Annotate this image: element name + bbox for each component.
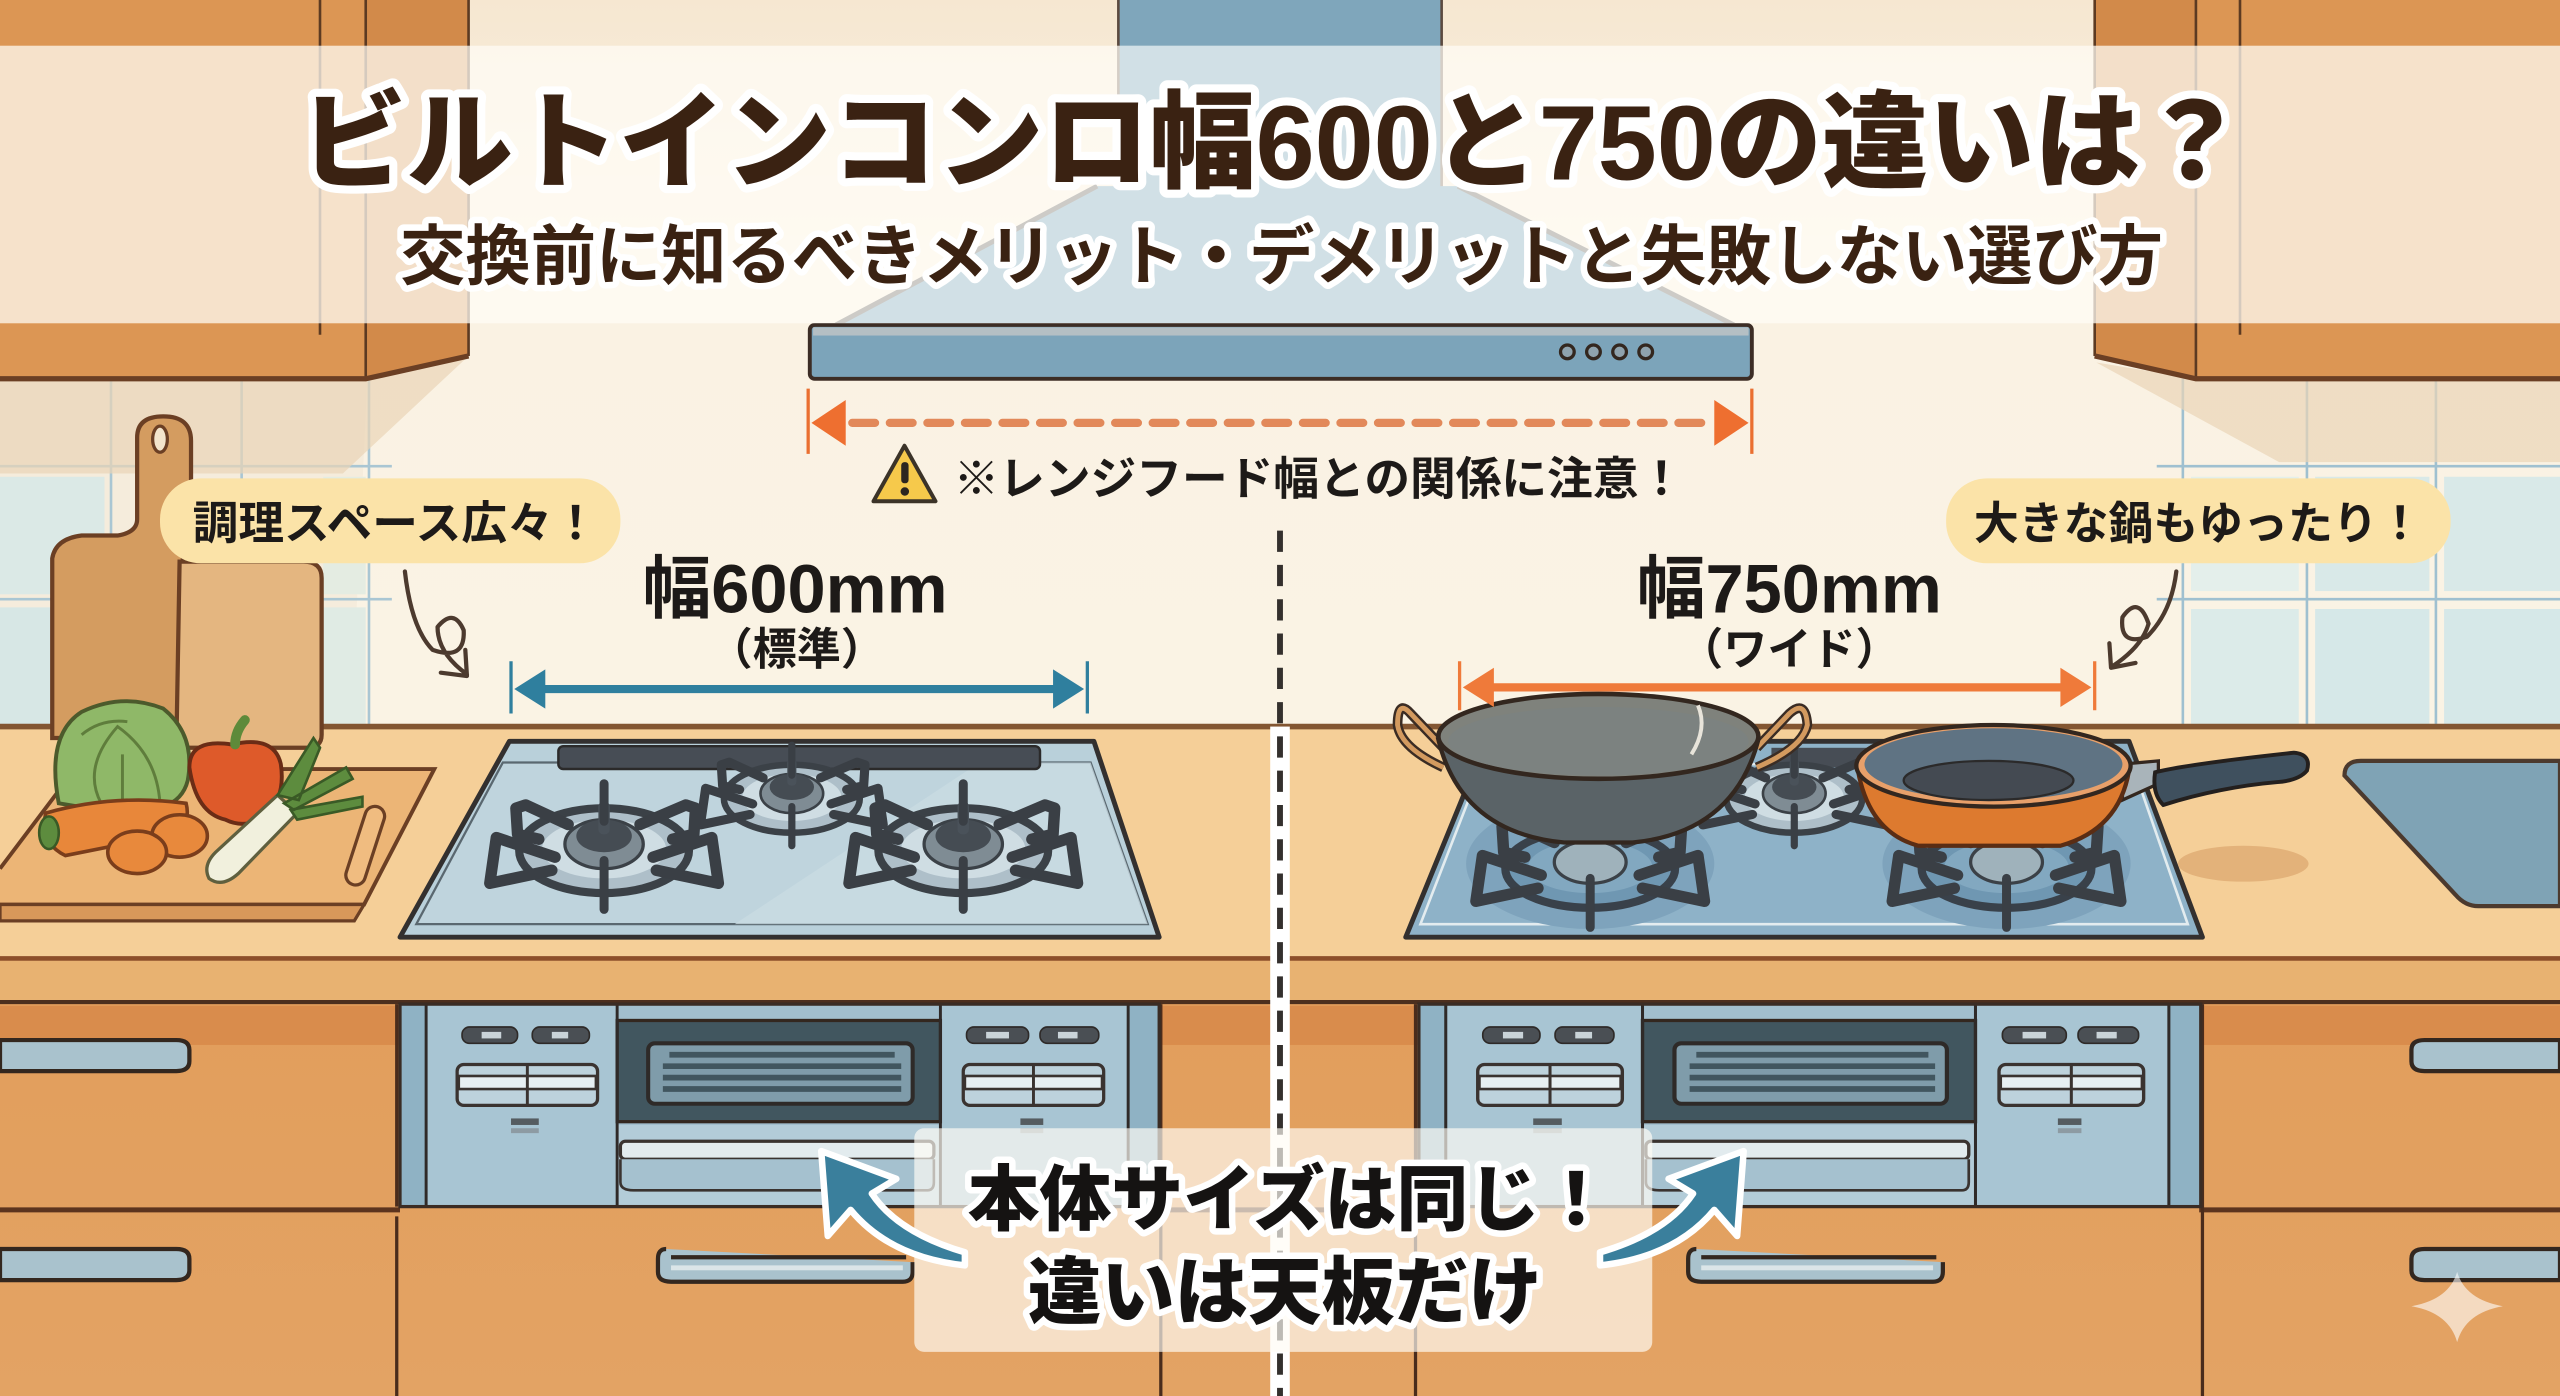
label: 750mm width: （ワイド） bbox=[1679, 626, 1900, 675]
carrot slices bbox=[108, 815, 207, 874]
burner: rear bbox=[1703, 745, 1886, 846]
burner: rear bbox=[700, 745, 883, 846]
carrot bbox=[39, 800, 187, 856]
cabinet handles bbox=[0, 1040, 2560, 1282]
upper cabinet left bbox=[0, 0, 469, 379]
board handle slot bbox=[343, 804, 387, 888]
sink bbox=[2344, 761, 2560, 906]
icon: frying pan bbox=[1856, 725, 2308, 846]
dimension arrow: 750mm bbox=[1460, 661, 2095, 710]
callout text: 本体サイズは同じ！ bbox=[968, 1161, 1612, 1241]
bell pepper bbox=[189, 720, 282, 824]
callout: large pots: 大きな鍋もゆったり！ bbox=[1974, 498, 2423, 549]
lower cabinets bbox=[0, 1004, 2560, 1396]
label: 600mm width: 幅600mm bbox=[643, 550, 948, 627]
range hood bbox=[810, 0, 1752, 379]
cabbage bbox=[55, 701, 189, 807]
icon: warning triangle bbox=[873, 446, 936, 501]
title banner bbox=[0, 46, 2560, 323]
callout: cooking space bbox=[160, 478, 620, 563]
label: 600mm width bbox=[643, 550, 948, 675]
burner: left bbox=[1476, 802, 1704, 927]
arrow: left bbox=[821, 1151, 965, 1265]
right tile backsplash bbox=[2157, 379, 2560, 727]
burner: right bbox=[1892, 802, 2121, 927]
chopping board bbox=[0, 769, 436, 921]
dimension arrow: 600mm bbox=[511, 661, 1087, 714]
stove top: 600mm bbox=[400, 741, 1159, 937]
title: ビルトインコンロ幅600と750の違いは？ bbox=[301, 85, 2246, 203]
icon: wok bbox=[1398, 694, 1807, 842]
burner: left bbox=[490, 784, 718, 909]
pan shadow on counter bbox=[2178, 846, 2309, 882]
built-in unit: 600mm bbox=[400, 1004, 1159, 1207]
hood control buttons bbox=[1560, 345, 1653, 359]
subtitle: 交換前に知るべきメリット・デメリットと失敗しない選び方 bbox=[400, 220, 2163, 293]
back cutting boards bbox=[52, 416, 322, 748]
range hood width dimension arrow bbox=[808, 389, 1752, 454]
left tile backsplash bbox=[0, 379, 392, 730]
arrow: right bbox=[1600, 1151, 1744, 1265]
callout: cooking space: 調理スペース広々！ bbox=[193, 498, 598, 549]
green onion bbox=[207, 738, 362, 882]
burner: right bbox=[849, 784, 1078, 909]
curly arrow: cooking space bbox=[405, 571, 467, 676]
center divider bbox=[1270, 531, 1290, 1396]
icon: sparkle watermark bbox=[2411, 1272, 2503, 1342]
upper cabinet right bbox=[2095, 0, 2560, 379]
stove top: 750mm bbox=[1406, 741, 2202, 937]
label: 750mm width bbox=[1637, 550, 1942, 675]
built-in unit: 750mm bbox=[1419, 1004, 2201, 1207]
curly arrow: large pots bbox=[2109, 571, 2176, 668]
bottom callout: same body size: 違いは天板だけ bbox=[1028, 1251, 1542, 1334]
vegetables bbox=[39, 701, 362, 882]
label: 600mm width: （標準） bbox=[709, 626, 885, 675]
range hood caution text: ※レンジフード幅との関係に注意！ bbox=[953, 454, 1684, 505]
bottom callout: same body size bbox=[821, 1128, 1744, 1352]
callout: large pots bbox=[1946, 478, 2451, 563]
label: 750mm width: 幅750mm bbox=[1637, 550, 1942, 627]
cabinet shadows on wall bbox=[0, 356, 2560, 473]
wall background bbox=[0, 0, 2560, 730]
countertop bbox=[0, 727, 2560, 1003]
